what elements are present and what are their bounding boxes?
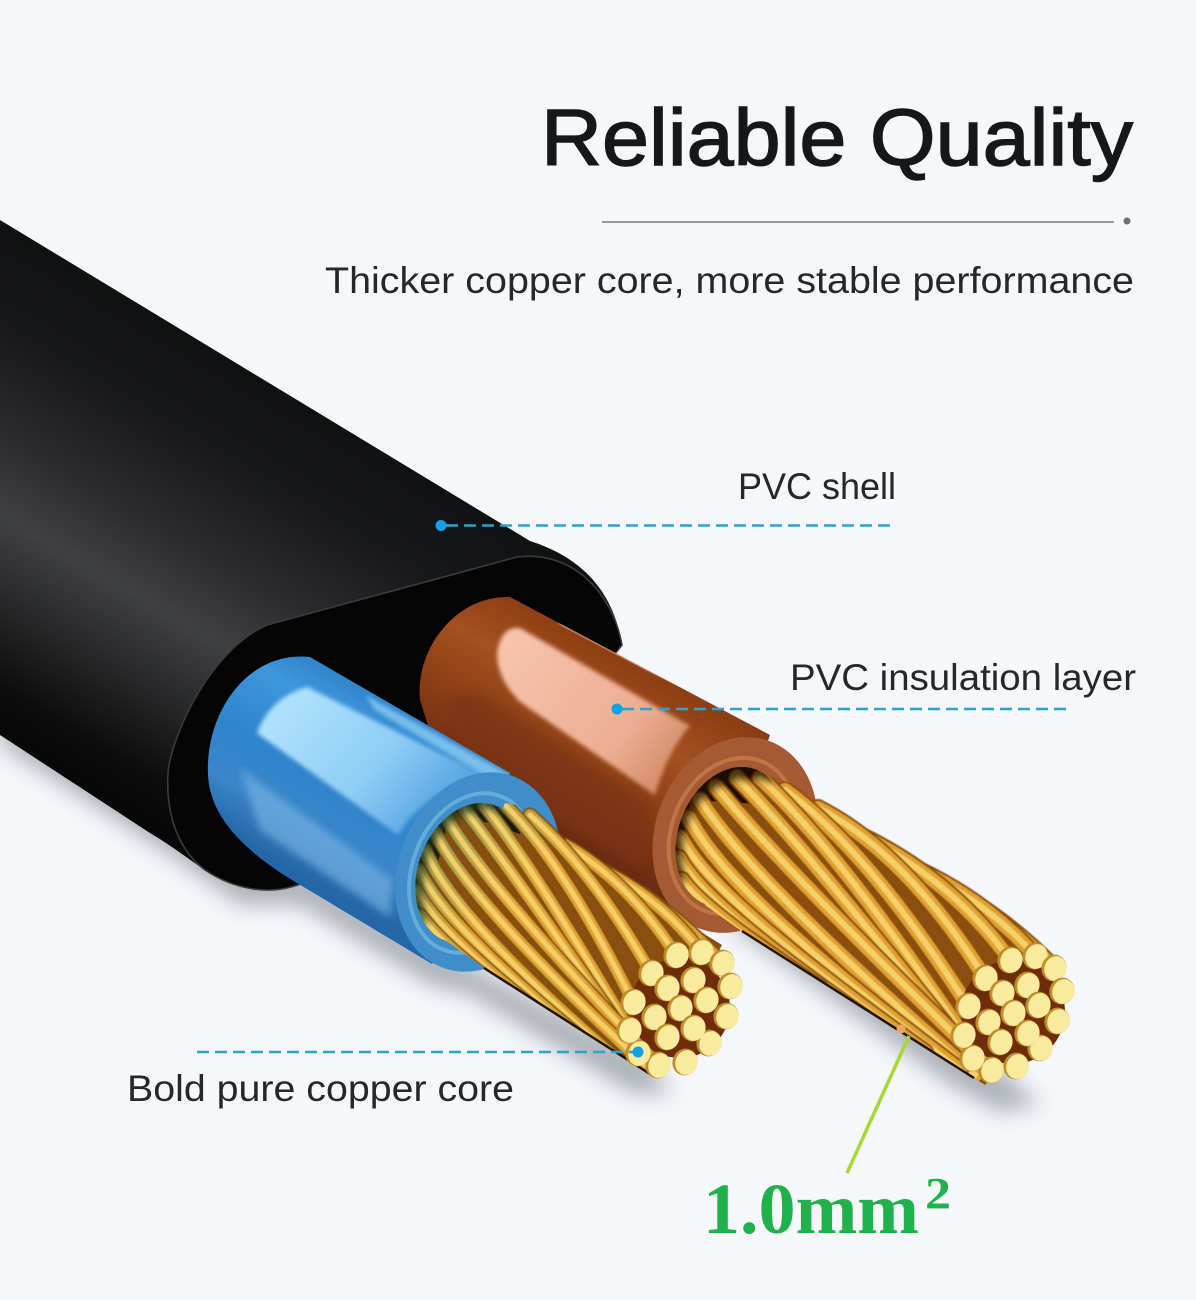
callout line: wire gauge	[847, 1024, 909, 1173]
blue tube	[208, 656, 510, 964]
label: Bold pure copper core: Bold pure copper core	[127, 1068, 514, 1109]
shell front face	[168, 556, 622, 890]
brown wire bottom edge	[742, 931, 974, 1078]
title rule with dot	[602, 218, 1130, 224]
label: PVC insulation layer: PVC insulation layer	[790, 657, 1136, 698]
brown tube highlights	[455, 622, 692, 817]
blue ring lighter rim	[388, 775, 556, 971]
blue ring opening	[397, 788, 543, 958]
blue wire bottom edge	[484, 968, 650, 1074]
label: PVC shell: PVC shell	[738, 466, 896, 507]
blue wire end caps	[613, 935, 746, 1082]
blue insulated wire	[208, 656, 746, 1082]
title: Reliable Quality	[541, 93, 1133, 182]
brown wire copper strands	[675, 772, 1065, 1085]
wire gauge value: 1.0mm	[703, 1169, 919, 1249]
brown tube	[420, 597, 770, 925]
callout line: copper core	[197, 1046, 644, 1058]
cast shadows	[0, 720, 1040, 1112]
shadow inside brown opening	[675, 772, 775, 885]
subtitle: Thicker copper core, more stable performance	[325, 260, 1134, 301]
blue tube highlights	[240, 687, 510, 917]
shadow inside blue opening	[416, 802, 515, 925]
brown insulated wire	[420, 597, 1078, 1087]
shell body	[0, 220, 622, 890]
cable: black PVC shell	[0, 220, 622, 890]
blue wire copper strands	[416, 802, 722, 1079]
callout line: PVC insulation layer	[612, 704, 1066, 714]
callout line: PVC shell	[436, 520, 890, 531]
blue ring end	[368, 749, 588, 995]
brown ring lighter rim	[647, 740, 819, 932]
brown ring end	[626, 714, 844, 956]
brown wire end caps	[947, 939, 1078, 1087]
wire gauge value: 2	[925, 1169, 951, 1218]
brown ring opening	[657, 751, 805, 923]
